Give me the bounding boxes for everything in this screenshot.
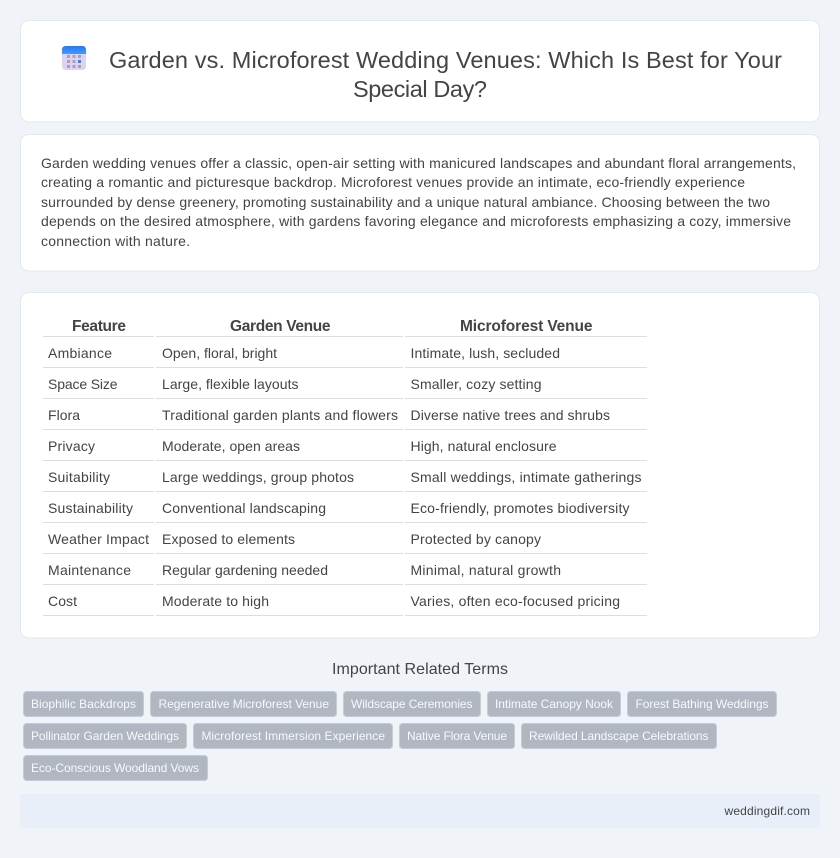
table row: Ambiance: Intimate, lush, secluded [410,345,560,361]
table row: Weather Impact [43,531,647,554]
table row: Maintenance: Maintenance [48,562,131,578]
tag: Forest Bathing Weddings [628,692,776,716]
tag: Pollinator Garden Weddings: Pollinator Garden Weddings [31,729,179,743]
tag: Forest Bathing Weddings: Forest Bathing Weddings [636,697,768,711]
tag: Rewilded Landscape Celebrations [522,724,716,748]
table header row: Microforest Venue [460,318,593,335]
table row: Cost: Moderate to high [162,593,269,609]
table row: Suitability: Suitability [48,469,110,485]
table row: Cost: Varies, often eco-focused pricing [410,593,620,609]
table row: Maintenance [43,562,647,585]
tag: Wildscape Ceremonies: Wildscape Ceremonies [351,697,472,711]
tag: Microforest Immersion Experience [194,724,392,748]
tag: Intimate Canopy Nook: Intimate Canopy Nook [495,697,614,711]
table header row [43,318,647,337]
icon: calendar [62,46,86,70]
tag: Regenerative Microforest Venue: Regenerative Microforest Venue [158,697,329,711]
table row: Space Size: Large, flexible layouts [162,376,298,392]
table row: Ambiance: Open, floral, bright [162,345,277,361]
title: Garden vs. Microforest Wedding Venues: Which Is Best for Your [109,47,782,73]
table header row: Feature [72,318,126,335]
text block: introduction paragraph: depends on the desired atmosphere, with gardens favoring elegance and microforests emphasizing a cozy, immersive [41,213,791,229]
title: Special Day? [353,76,487,102]
table row: Sustainability: Sustainability [48,500,133,516]
table row: Flora: Flora [48,407,80,423]
text block: introduction paragraph [41,155,796,249]
tag: Pollinator Garden Weddings [24,724,186,748]
table row: Flora: Diverse native trees and shrubs [410,407,610,423]
tag: Intimate Canopy Nook [488,692,620,716]
footer: weddingdif.com [724,804,810,818]
table row: Cost: Cost [48,593,77,609]
tag: Regenerative Microforest Venue [150,692,336,716]
tag: Eco-Conscious Woodland Vows: Eco-Conscious Woodland Vows [31,761,199,775]
tag: Native Flora Venue: Native Flora Venue [407,729,507,743]
tag: Native Flora Venue [400,724,514,748]
table row: Weather Impact: Weather Impact [48,531,149,547]
panel: header [20,20,820,122]
table row: Suitability [43,469,647,492]
table row: Privacy [43,438,647,461]
panel: comparison table [20,292,820,638]
panel: introduction [20,134,820,271]
table row: Ambiance [43,345,647,368]
table row: Space Size: Smaller, cozy setting [410,376,542,392]
text block: introduction paragraph: connection with nature. [41,233,190,249]
table row: Sustainability: Eco-friendly, promotes biodiversity [410,500,630,516]
table row: Flora: Traditional garden plants and flowers [162,407,398,423]
tag: Biophilic Backdrops: Biophilic Backdrops [31,697,136,711]
table row: Sustainability: Conventional landscaping [162,500,326,516]
table row: Space Size [43,376,647,399]
footer [20,794,820,828]
tag: Microforest Immersion Experience: Microforest Immersion Experience [202,729,385,743]
table row: Sustainability [43,500,647,523]
table header row: Garden Venue [230,318,331,335]
table row: Privacy: High, natural enclosure [410,438,557,454]
tag: Eco-Conscious Woodland Vows [24,756,208,780]
table row: Flora [43,407,647,430]
table row: Ambiance: Ambiance [48,345,112,361]
table row: Suitability: Small weddings, intimate gatherings [410,469,642,485]
table row: Privacy: Privacy [48,438,95,454]
table row: Suitability: Large weddings, group photos [162,469,354,485]
tag: Wildscape Ceremonies [344,692,480,716]
panel: related term tags [24,692,776,780]
text block: introduction paragraph: creating a romantic and picturesque backdrop. Microforest venues provide an intimate, eco-friendly experience [41,174,745,190]
table row: Weather Impact: Exposed to elements [162,531,295,547]
table row: Space Size: Space Size [48,376,118,392]
tag: Biophilic Backdrops [24,692,144,716]
tag: Rewilded Landscape Celebrations: Rewilded Landscape Celebrations [529,729,708,743]
title [109,47,782,102]
heading: important related terms: Important Related Terms [332,661,508,678]
table row: Privacy: Moderate, open areas [162,438,300,454]
text block: introduction paragraph: surrounded by dense greenery, promoting sustainability and a unique natural ambiance. Choosing between the two [41,194,770,210]
table row: Maintenance: Regular gardening needed [162,562,328,578]
table row: Maintenance: Minimal, natural growth [410,562,561,578]
table row: Cost [43,593,647,616]
table row: Weather Impact: Protected by canopy [410,531,541,547]
text block: introduction paragraph: Garden wedding venues offer a classic, open-air setting with manicured landscapes and abundant floral arrangements, [41,155,796,171]
